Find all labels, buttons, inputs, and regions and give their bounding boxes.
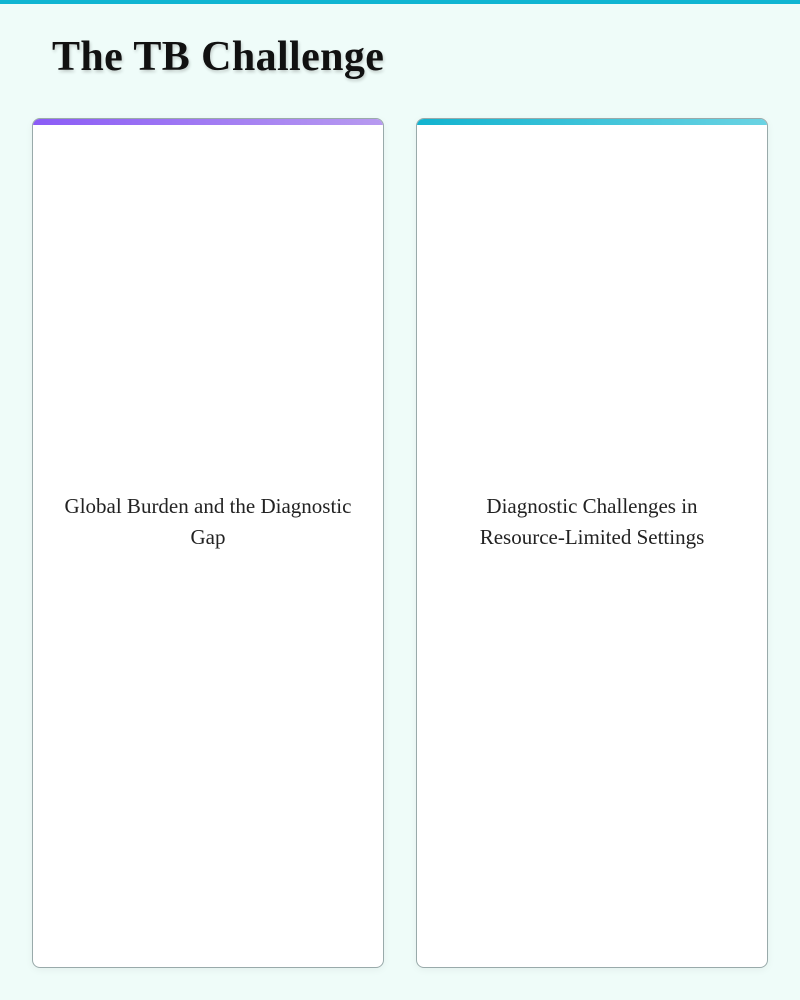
panel heading: diagnostic challenges: Diagnostic Challenges in Resource-Limited Settings (480, 494, 704, 549)
panel: global burden (32, 118, 384, 968)
panel: diagnostic challenges (416, 118, 768, 968)
panel heading: global burden: Global Burden and the Diagnostic Gap (65, 494, 351, 549)
title: The TB Challenge (52, 34, 384, 80)
